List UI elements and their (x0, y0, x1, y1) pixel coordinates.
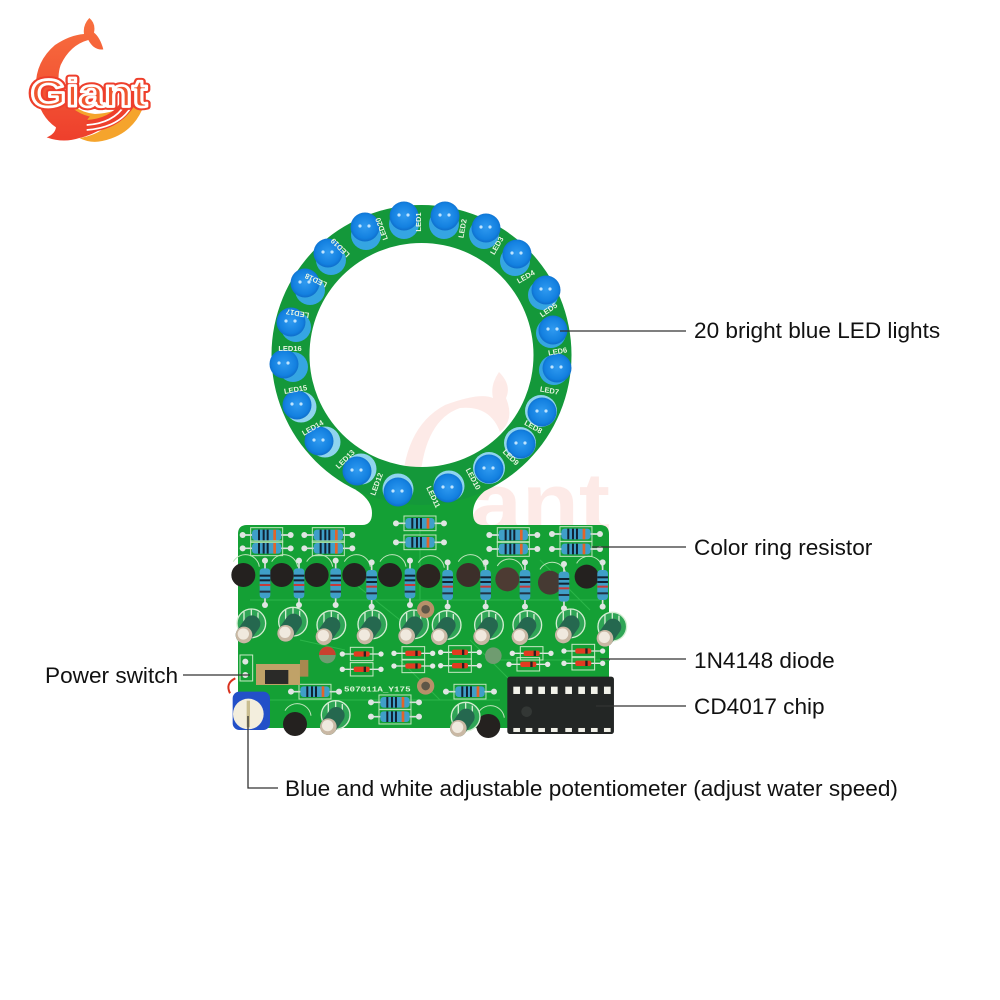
silkscreen LED labels: LED10 (464, 466, 483, 491)
silkscreen LED labels: LED12 (368, 472, 385, 497)
silkscreen LED labels: LED9 (501, 447, 521, 467)
silkscreen LED labels: LED6 (547, 345, 568, 358)
diodes (340, 644, 605, 676)
leader line: chip (596, 705, 686, 707)
circuit traces (250, 525, 610, 700)
Giant wordmark: Giant (31, 72, 147, 116)
silkscreen LED labels: LED20 (373, 216, 390, 241)
leader line: LED (560, 330, 686, 332)
silkscreen LED labels (278, 212, 568, 509)
silkscreen LED labels: LED17 (285, 307, 310, 320)
sound arcs (87, 103, 135, 133)
silkscreen LED labels: LED3 (488, 235, 506, 256)
silkscreen LED labels: LED16 (278, 344, 302, 353)
arc lines (87, 105, 132, 130)
whale belly (59, 85, 142, 142)
blue LEDs (270, 202, 572, 506)
adjustable potentiometer (228, 678, 270, 730)
label: power switch: Power switch (45, 663, 178, 688)
silkscreen LED labels: LED15 (283, 383, 308, 396)
board code text: 507011A_Y175 (344, 687, 411, 695)
watermark: faint Giant logo: ant (470, 456, 610, 550)
silkscreen LED labels: LED19 (329, 236, 352, 259)
silkscreen LED labels: LED2 (456, 218, 469, 239)
transistors (231, 555, 603, 738)
label: chip: CD4017 chip (694, 694, 825, 719)
watermark: faint Giant logo (402, 372, 610, 550)
label: LED lights: 20 bright blue LED lights (694, 318, 940, 343)
silkscreen LED labels: LED18 (303, 271, 328, 289)
silkscreen LED labels: LED13 (334, 448, 357, 471)
circuit board components (228, 516, 627, 738)
Giant wordmark: Giant (31, 72, 147, 116)
leader line: power switch (183, 674, 250, 676)
label: resistor: Color ring resistor (694, 535, 873, 560)
capacitors (236, 607, 627, 737)
silkscreen LED labels: LED5 (538, 301, 559, 319)
leader line: resistor (592, 546, 686, 548)
board outline with neck (238, 490, 609, 728)
silkscreen LED labels: LED7 (539, 384, 560, 397)
logo: Giant whale (31, 18, 147, 142)
leader line: diode (600, 658, 686, 660)
label: potentiometer: Blue and white adjustable potentiometer (adjust water speed) (285, 776, 898, 801)
silkscreen LED labels: LED11 (424, 485, 442, 509)
label: diode: 1N4148 diode (694, 648, 835, 673)
mounting holes (319, 601, 502, 695)
resistors (240, 516, 608, 724)
whale body (36, 18, 107, 140)
silkscreen LED labels: LED8 (523, 418, 544, 436)
CD4017 chip (507, 677, 614, 734)
leader line: potentiometer (248, 716, 278, 788)
silkscreen LED labels: LED14 (300, 418, 326, 438)
power switch (240, 655, 308, 685)
silkscreen LED labels: LED1 (414, 212, 423, 232)
silkscreen LED labels: LED4 (515, 268, 537, 286)
LED ring board (270, 202, 572, 509)
